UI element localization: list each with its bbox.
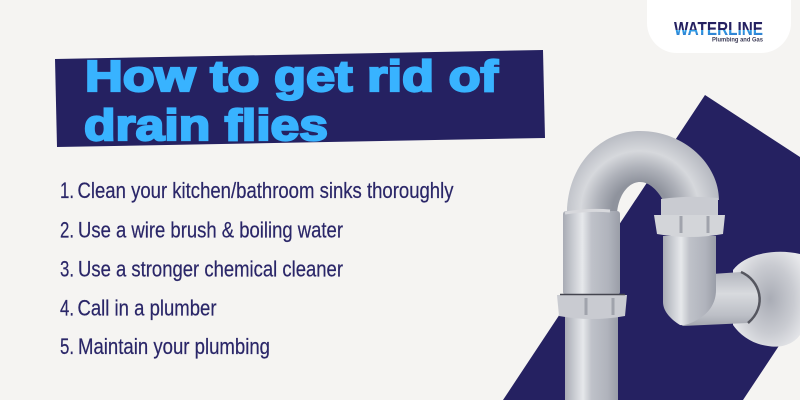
chrome P-trap pipe: [557, 131, 800, 400]
item 5: 5.: [60, 334, 74, 359]
arc bend: [567, 131, 719, 214]
left lower tube: [565, 315, 618, 400]
logo tagline: Plumbing and Gas: [712, 38, 764, 44]
item 5: Maintain your plumbing: [78, 334, 270, 359]
item 4: 4.: [60, 296, 74, 320]
elbow and right riser: [663, 236, 716, 325]
title text: [84, 52, 498, 150]
navy diagonal shape: [503, 95, 800, 400]
left upper tube seam: [565, 210, 610, 213]
flange seam: [741, 272, 760, 323]
item 3: Use a stronger chemical cleaner: [78, 256, 343, 282]
horizontal outlet: [682, 272, 759, 326]
left upper tube: [563, 211, 620, 295]
left nut: [557, 294, 627, 319]
numbered list: [60, 178, 454, 359]
item 3: 3.: [60, 256, 74, 282]
logo tab: [647, 0, 791, 53]
right collar: [661, 197, 718, 216]
title banner: [55, 50, 545, 150]
item 1: 1.: [60, 178, 74, 203]
right nut: [654, 215, 725, 237]
wall flange: [733, 252, 800, 347]
item 4: Call in a plumber: [78, 296, 216, 320]
item 2: 2.: [60, 218, 74, 242]
logo wordmark: WATERLINE: [674, 19, 763, 39]
item 2: Use a wire brush & boiling water: [78, 218, 343, 242]
title text: drain flies: [84, 101, 328, 150]
title text: How to get rid of: [85, 52, 498, 101]
item 1: Clean your kitchen/bathroom sinks thoroughly: [78, 178, 454, 203]
